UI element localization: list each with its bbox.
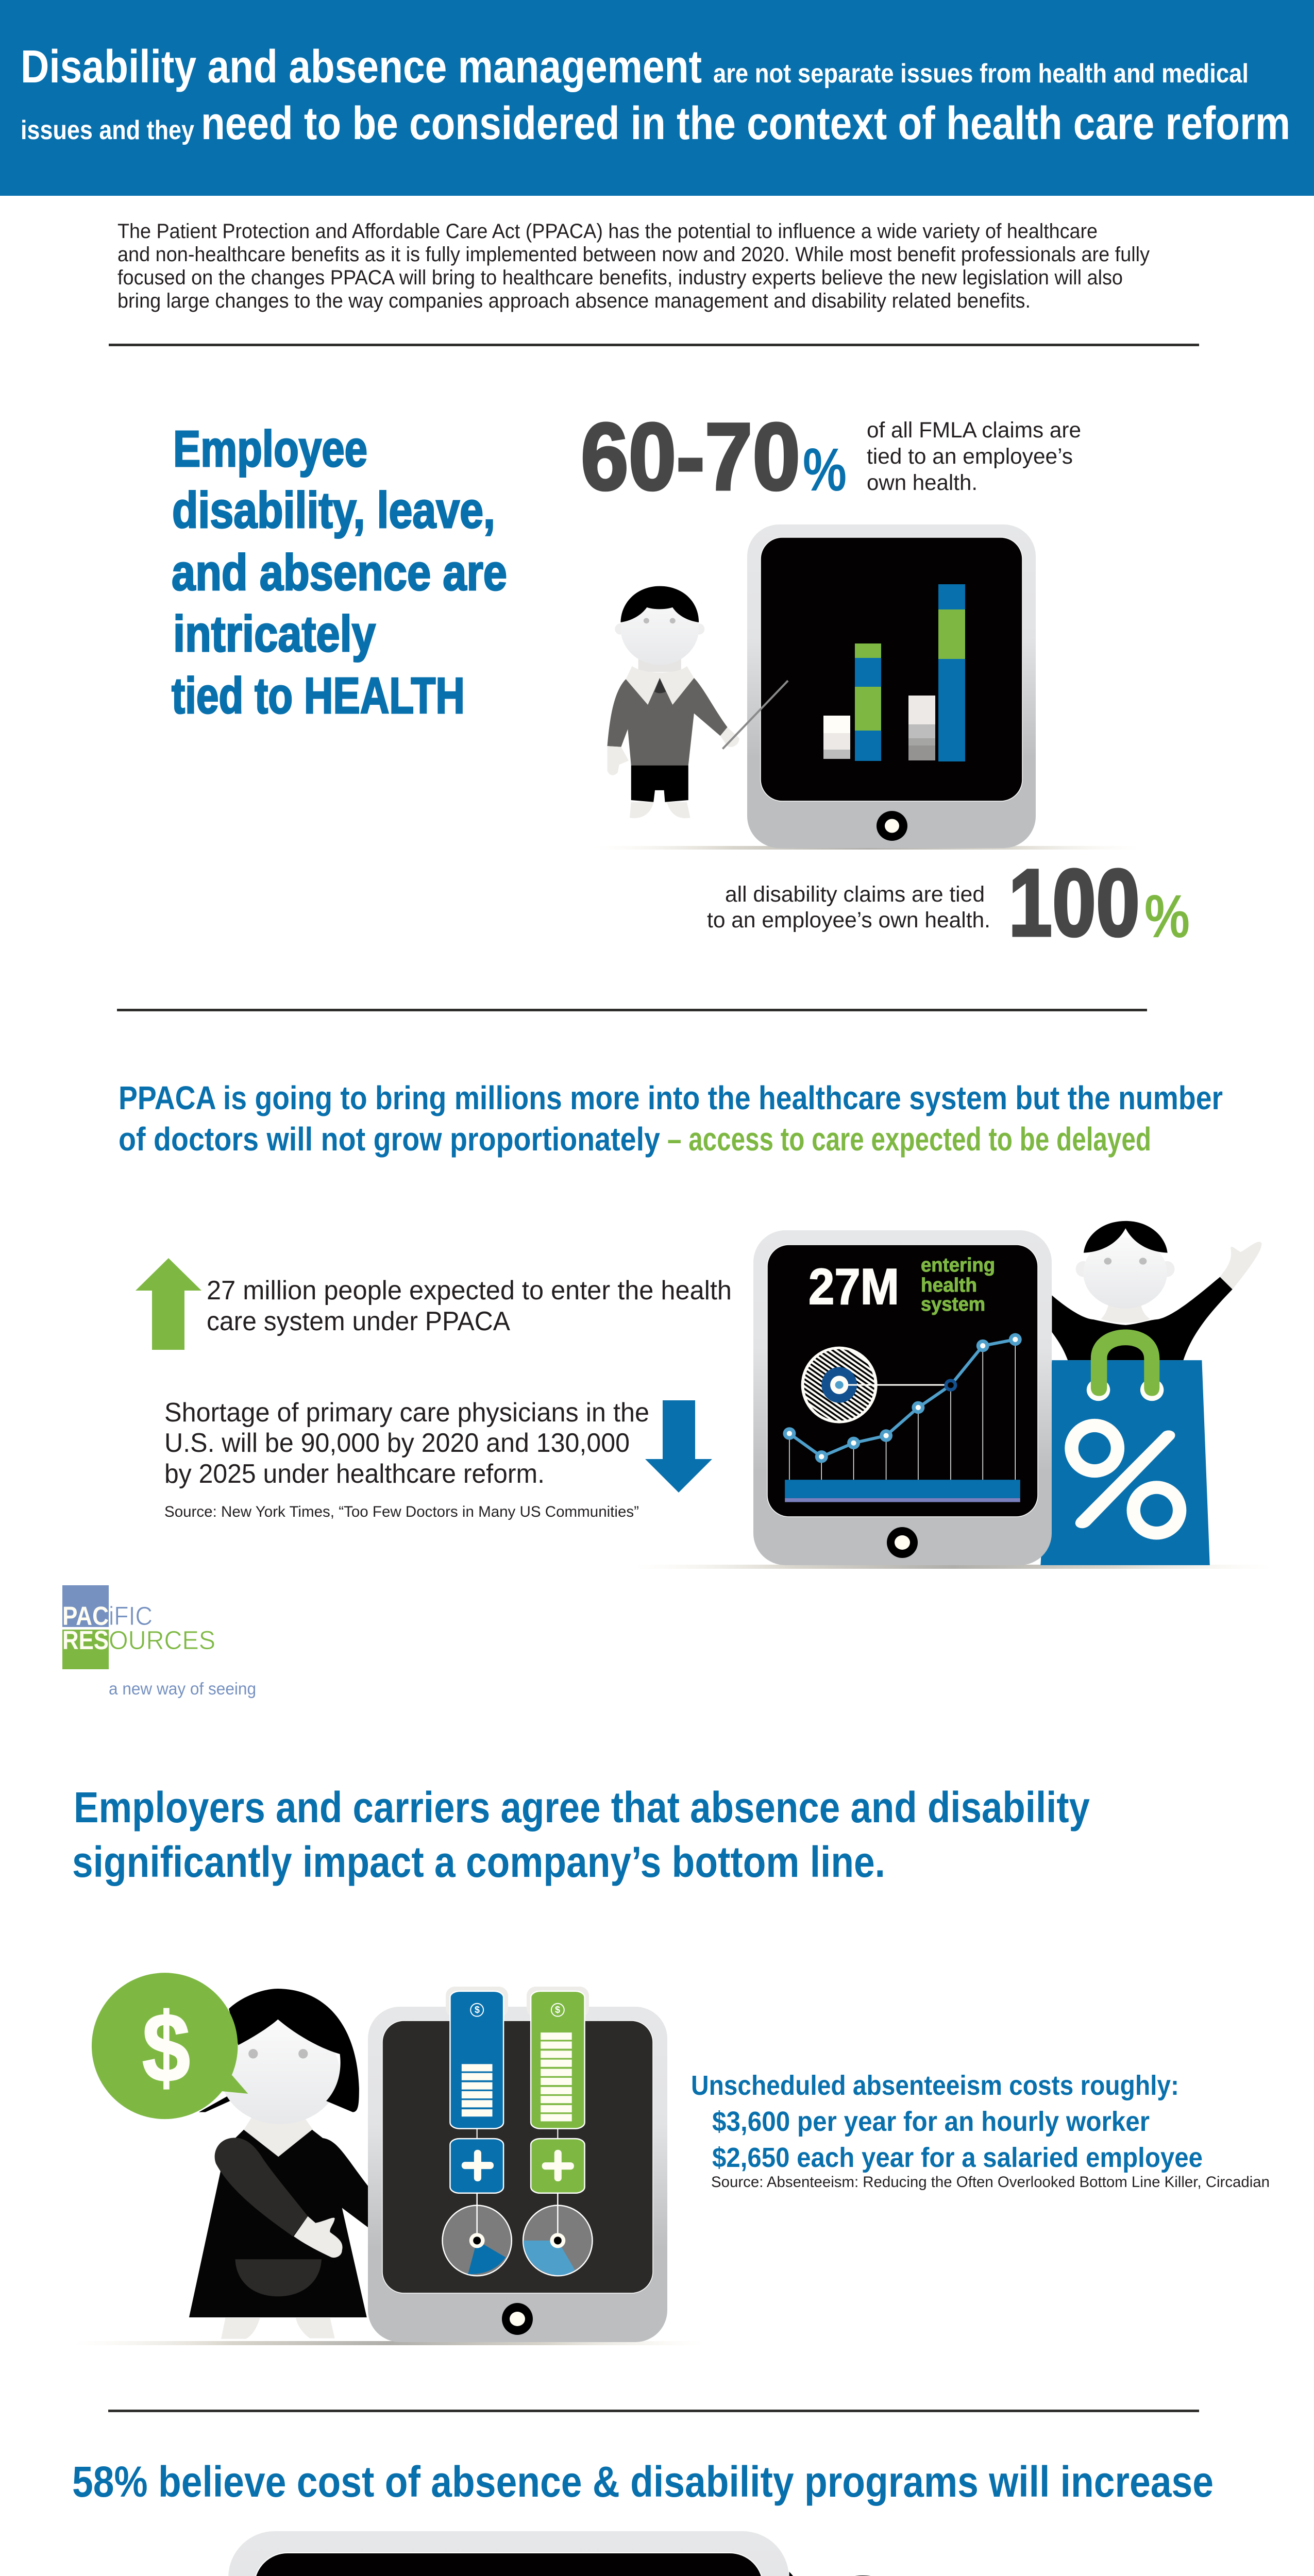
panel: program cost: [72, 2458, 1214, 2576]
stat text: disability claims: all disability claims are tied: [725, 882, 985, 907]
logo: Pacific Resources: OURCES: [109, 1625, 215, 1655]
figure: person with shopping bag: [1040, 1221, 1261, 1565]
logo: Pacific Resources: RES: [62, 1625, 109, 1655]
ground shadow: [73, 2341, 705, 2345]
heading: employee disability: tied to HEALTH: [172, 667, 465, 724]
text: 27 million: care system under PPACA: [207, 1307, 510, 1336]
panel: bottom line: [72, 1783, 1270, 2345]
figure: woman with speech bubble: [92, 1973, 368, 2339]
heading: PPACA access: [119, 1079, 1223, 1158]
heading: employers and carriers: [72, 1783, 1090, 1886]
header title line 1: [21, 41, 1249, 93]
ground shadow: [596, 846, 1140, 850]
source note: Source: New York Times, “Too Few Doctors in Many US Communities”: [164, 1503, 639, 1520]
panel: health ties: [172, 404, 1190, 956]
stat: 100 percent: 100: [1008, 850, 1140, 956]
logo: Pacific Resources: PAC: [62, 1601, 109, 1631]
arrow: up green: [136, 1258, 201, 1350]
stat: 27M: 27M: [808, 1258, 899, 1315]
ground shadow: [634, 1565, 1273, 1569]
tablet with cost cards: [368, 1987, 667, 2342]
bar chart: [823, 584, 965, 761]
cost cards: [443, 1991, 593, 2276]
intro paragraph: focused on the changes PPACA will bring to healthcare benefits, industry experts believe the new legislation will also: [117, 266, 1123, 289]
dollar icons on cards: $: [475, 2005, 480, 2015]
heading: employee disability: intricately: [173, 605, 376, 662]
stat text: disability claims: to an employee’s own health.: [707, 908, 990, 933]
shopping bag: [1040, 1329, 1210, 1565]
text: absenteeism costs: $2,650 each year for a salaried employee: [712, 2142, 1203, 2173]
figure: boy with speech bubble: [789, 2572, 1048, 2576]
tablet with bar chart: [747, 524, 1036, 848]
text: 27 million: 27 million people expected to enter the health: [207, 1276, 732, 1306]
text: absenteeism costs: $3,600 per year for an hourly worker: [712, 2106, 1150, 2137]
text: physician shortage: Shortage of primary care physicians in the: [164, 1398, 649, 1428]
stat: 60-70 percent: 60-70: [581, 404, 800, 510]
logo: Pacific Resources: a new way of seeing: [109, 1679, 256, 1698]
logo: Pacific Resources: iFIC: [109, 1601, 153, 1631]
heading: employers and carriers: significantly impact a company’s bottom line.: [72, 1838, 885, 1886]
text: physician shortage: [164, 1398, 649, 1489]
source note: Source: Absenteeism: Reducing the Often Overlooked Bottom Line Killer, Circadian: [711, 2174, 1270, 2191]
heading: employee disability: and absence are: [172, 544, 507, 601]
text: physician shortage: U.S. will be 90,000 by 2020 and 130,000: [164, 1428, 630, 1458]
dollar icons on cards: $: [555, 2005, 560, 2015]
header title line 1: are not separate issues from health and medical: [713, 59, 1249, 89]
intro paragraph: [117, 220, 1150, 312]
heading: employers and carriers: Employers and carriers agree that absence and disability: [74, 1783, 1090, 1832]
text: absenteeism costs: [691, 2070, 1203, 2173]
label: entering health system: entering: [921, 1255, 995, 1276]
logo: Pacific Resources: [62, 1585, 256, 1698]
stat: 60-70 percent: %: [803, 436, 847, 504]
panel: access to care: [62, 1079, 1273, 1698]
arrow: down blue: [645, 1400, 712, 1493]
intro paragraph: bring large changes to the way companies approach absence management and disability related benefits.: [117, 290, 1031, 312]
line chart: [783, 1333, 1022, 1502]
stat: 100 percent: %: [1144, 883, 1190, 951]
intro paragraph: The Patient Protection and Affordable Care Act (PPACA) has the potential to influence a wide variety of healthcare: [117, 220, 1098, 243]
stat text: FMLA claims: own health.: [867, 470, 978, 495]
text: absenteeism costs: Unscheduled absenteeism costs roughly:: [691, 2070, 1179, 2101]
dollar icons on cards: [475, 2005, 560, 2015]
speech bubble: [92, 1973, 248, 2119]
heading: employee disability: disability, leave,: [172, 482, 495, 538]
label: entering health system: health: [921, 1275, 977, 1296]
label: entering health system: system: [921, 1294, 985, 1315]
tablet with line chart: [753, 1230, 1052, 1565]
heading: PPACA access: of doctors will not grow proportionately: [119, 1121, 660, 1158]
stat text: FMLA claims: tied to an employee’s: [867, 444, 1073, 469]
tablet with statistics: [228, 2531, 789, 2576]
stat text: FMLA claims: [867, 418, 1081, 495]
text: physician shortage: by 2025 under healthcare reform.: [164, 1459, 545, 1489]
header banner: [0, 0, 1314, 196]
stat text: disability claims: [707, 882, 990, 933]
stat text: FMLA claims: of all FMLA claims are: [867, 418, 1081, 443]
heading: employee disability: Employee: [173, 420, 367, 477]
icon: dollar sign: $: [142, 1993, 190, 2103]
heading: PPACA access: – access to care expected to be delayed: [667, 1121, 1151, 1158]
figure: boy with pointer: [608, 586, 788, 818]
heading: employee disability: [172, 420, 507, 724]
header title line 1: Disability and absence management: [21, 41, 702, 93]
header title line 2: issues and they: [21, 115, 194, 145]
label: entering health system: [921, 1255, 995, 1315]
intro paragraph: and non-healthcare benefits as it is fully implemented between now and 2020. While most benefit professionals are fully: [117, 243, 1150, 266]
text: 27 million: [207, 1276, 732, 1336]
